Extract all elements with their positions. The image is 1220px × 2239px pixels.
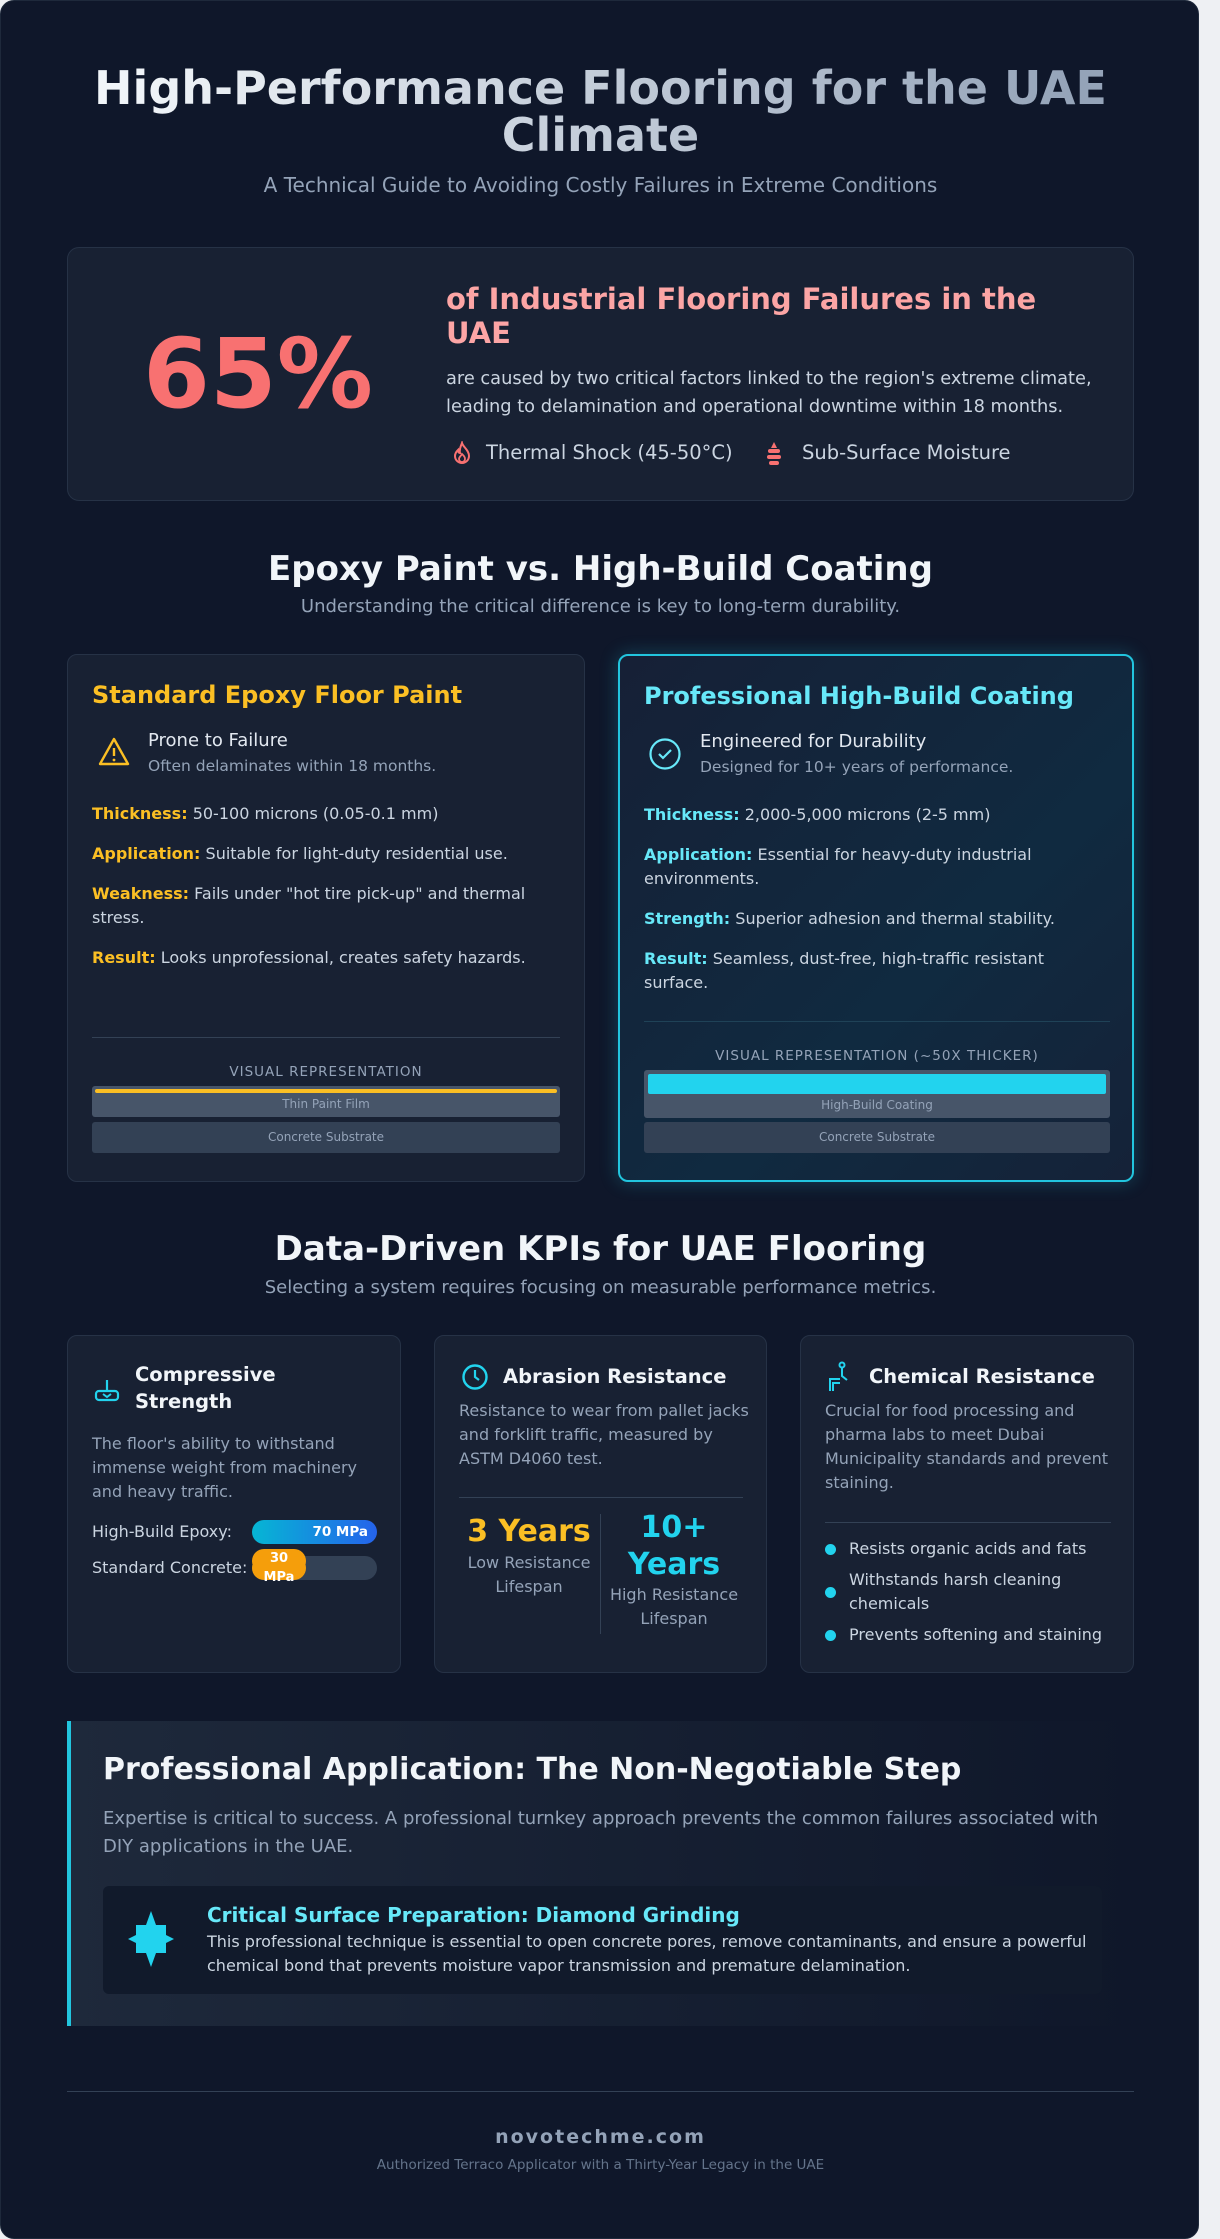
kpi title: Strength: [135, 1390, 232, 1413]
kpi title: Chemical Resistance: [869, 1365, 1095, 1388]
title: [1, 65, 1200, 159]
icon: flame: [454, 441, 470, 464]
status text: Designed for 10+ years of performance.: [700, 758, 1013, 776]
status text: [148, 730, 436, 775]
footer: tagline: Authorized Terraco Applicator with a Thirty-Year Legacy in the UAE: [377, 2157, 824, 2173]
stat: 10+ years: [610, 1510, 738, 1628]
stat: 10+ years: High Resistance: [610, 1585, 738, 1604]
visual representation: thick coating: [644, 1048, 1110, 1153]
icon: flask/lab: [829, 1362, 848, 1391]
section heading: Professional Application: The Non-Negotiable Step: [103, 1752, 961, 1787]
stat: 10+ years: Lifespan: [640, 1609, 708, 1628]
spec list: Result: Looks unprofessional, creates safety hazards.: [92, 948, 526, 967]
spec list: [92, 804, 526, 967]
title: High-Performance Flooring for the UAE: [94, 61, 1107, 115]
callout body: This professional technique is essential to open concrete pores, remove contaminants, and ensure a powerful chemical bond that prevents moisture vapor transmission and premature delamination.: [207, 1932, 1086, 1975]
icon: clock: [462, 1364, 488, 1390]
footer: website: novotechme.com: [495, 2126, 706, 2148]
panel: professional application: [67, 1721, 1134, 2026]
visual representation: thin film: [92, 1064, 560, 1153]
bar chart: MPa: [92, 1520, 377, 1585]
visual representation: thin film: VISUAL REPRESENTATION: [229, 1064, 423, 1080]
card title: Professional High-Build Coating: [644, 682, 1074, 710]
panel: 65% stat: [67, 247, 1134, 501]
kpi description: Resistance to wear from pallet jacks and forklift traffic, measured by ASTM D4060 test.: [459, 1401, 749, 1468]
visual representation: thick coating: High-Build Coating: [821, 1098, 933, 1112]
stat: 10+ years: Years: [628, 1547, 720, 1582]
panel: professional high-build: [618, 654, 1134, 1182]
icon: check circle: [649, 738, 681, 770]
bullet list: Withstands harsh cleaning chemicals: [849, 1570, 1061, 1613]
stat: 3 years: [467, 1514, 591, 1596]
heading: comparison: Epoxy Paint vs. High-Build Coating: [268, 549, 933, 589]
bar chart: MPa: Standard Concrete:: [92, 1558, 247, 1577]
status text: Engineered for Durability: [700, 731, 926, 752]
panel: abrasion resistance: [434, 1335, 767, 1673]
kpi title: [135, 1363, 276, 1413]
icon: warning: [98, 738, 130, 766]
title: Climate: [502, 108, 699, 162]
visual representation: thick coating: VISUAL REPRESENTATION (~50X THICKER): [715, 1048, 1039, 1064]
subheading: comparison: Understanding the critical difference is key to long-term durability.: [301, 596, 900, 617]
stat: 10+ years: 10+: [641, 1510, 707, 1545]
spec list: Thickness: 50-100 microns (0.05-0.1 mm): [92, 804, 438, 823]
bar chart: MPa: 30: [270, 1551, 288, 1566]
subheading: KPIs: Selecting a system requires focusing on measurable performance metrics.: [265, 1277, 936, 1298]
icon row: causes: Sub-Surface Moisture: [802, 441, 1011, 464]
spec list: Application: Suitable for light-duty residential use.: [92, 844, 508, 863]
spec list: Thickness: 2,000-5,000 microns (2-5 mm): [644, 805, 990, 824]
bullet list: Prevents softening and staining: [849, 1625, 1102, 1644]
heading: KPIs: Data-Driven KPIs for UAE Flooring: [275, 1229, 926, 1269]
section body: Expertise is critical to success. A professional turnkey approach prevents the common failures associated with DIY applications in the UAE.: [103, 1808, 1098, 1857]
kpi title: Abrasion Resistance: [503, 1365, 726, 1388]
stat: 3 years: Lifespan: [495, 1577, 563, 1596]
bar chart: MPa: 70 MPa: [312, 1524, 368, 1540]
icon: diamond star: [128, 1911, 174, 1967]
callout: diamond grinding: [103, 1886, 1102, 1994]
icon: moisture: [767, 442, 781, 465]
visual representation: thin film: Concrete Substrate: [268, 1130, 384, 1144]
icon: weight: [94, 1380, 120, 1402]
stat: 3 years: Low Resistance: [468, 1553, 590, 1572]
subtitle: A Technical Guide to Avoiding Costly Failures in Extreme Conditions: [264, 173, 937, 197]
bullet list: Resists organic acids and fats: [849, 1539, 1086, 1558]
spec list: Weakness: Fails under "hot tire pick-up" and thermal stress.: [92, 884, 525, 927]
callout title: Critical Surface Preparation: Diamond Grinding: [207, 1903, 740, 1927]
kpi title: Compressive: [135, 1363, 276, 1386]
visual representation: thick coating: Concrete Substrate: [819, 1130, 935, 1144]
big stat number: 65%: [143, 318, 373, 430]
spec list: Application: Essential for heavy-duty industrial environments.: [644, 845, 1032, 888]
stat: 3 years: 3 Years: [467, 1514, 591, 1549]
stat body: are caused by two critical factors linked to the region's extreme climate, leading to delamination and operational downtime within 18 months.: [446, 368, 1092, 417]
panel: chemical resistance: [800, 1335, 1134, 1673]
kpi description: The floor's ability to withstand immense weight from machinery and heavy traffic.: [92, 1434, 357, 1501]
spec list: Strength: Superior adhesion and thermal stability.: [644, 909, 1055, 928]
bullet list: [825, 1539, 1102, 1644]
stat heading: of Industrial Flooring Failures in the UAE: [446, 282, 1036, 350]
visual representation: thin film: Thin Paint Film: [282, 1097, 370, 1111]
icon row: causes: Thermal Shock (45-50°C): [486, 441, 733, 464]
status text: Often delaminates within 18 months.: [148, 757, 436, 775]
bar chart: MPa: MPa: [264, 1570, 294, 1585]
status text: [700, 731, 1013, 776]
panel: standard epoxy paint: [67, 654, 585, 1182]
kpi description: Crucial for food processing and pharma labs to meet Dubai Municipality standards and prevent staining.: [825, 1401, 1108, 1492]
spec list: Result: Seamless, dust-free, high-traffic resistant surface.: [644, 949, 1044, 992]
status text: Prone to Failure: [148, 730, 288, 751]
bar chart: MPa: High-Build Epoxy:: [92, 1522, 232, 1541]
panel: compressive strength: [67, 1335, 401, 1673]
icon row: causes: [454, 441, 1011, 465]
card title: Standard Epoxy Floor Paint: [92, 681, 462, 709]
spec list: [644, 805, 1055, 992]
